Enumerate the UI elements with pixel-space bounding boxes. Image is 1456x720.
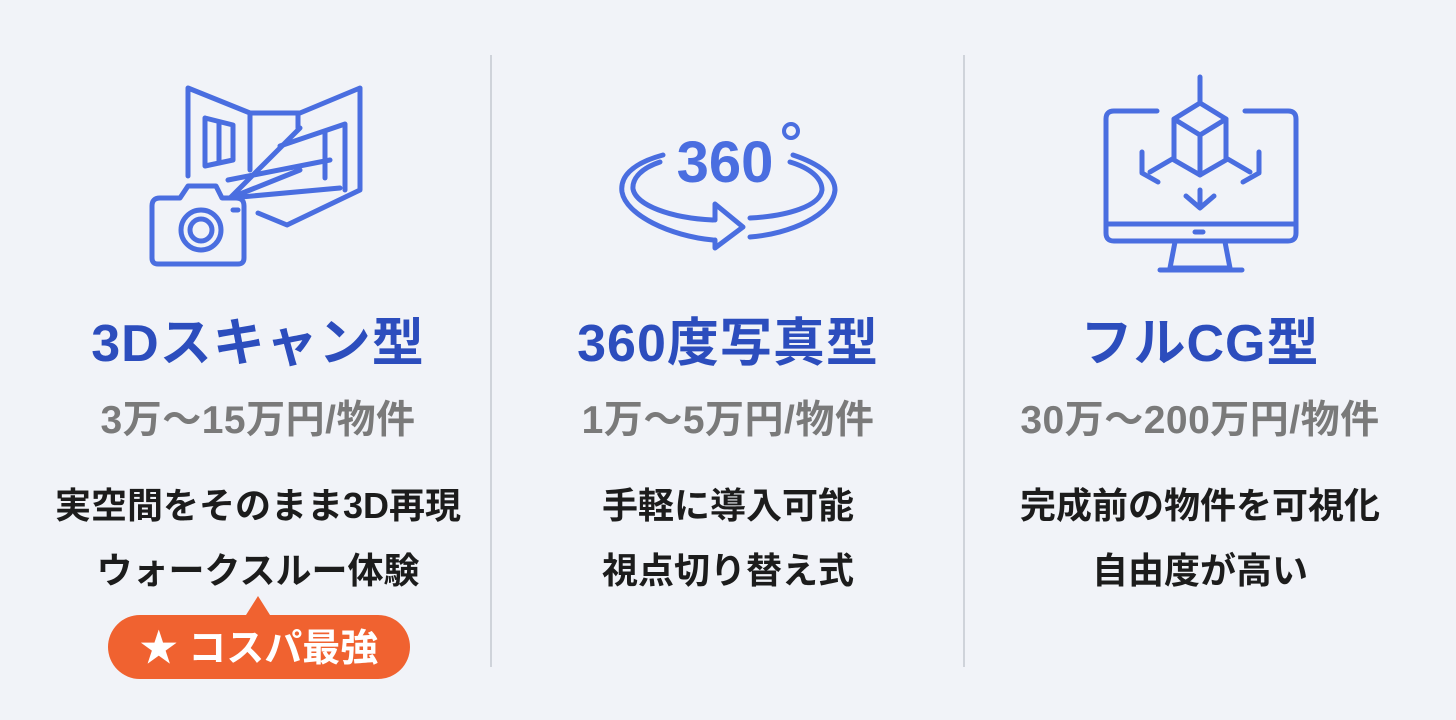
panel: 3D scan: ウォークスルー体験 [97,550,419,591]
panel: full CG: 自由度が高い [1092,550,1308,591]
panel: 360 photo: 視点切り替え式 [602,550,854,591]
callout badge [108,596,410,679]
price: 1万〜5万円/物件 [582,399,874,442]
heading: フルCG型 [1080,315,1320,373]
icon: 360 rotation: 360 [677,130,773,195]
heading: 360度写真型 [577,315,879,373]
panel: 360 photo [577,122,879,591]
heading: 3Dスキャン型 [91,315,425,373]
price: 3万〜15万円/物件 [101,399,415,442]
description: 完成前の物件を可視化 [1020,485,1380,526]
icon: monitor with cube [1104,74,1298,272]
panel: 3D scan [55,86,461,679]
icon: 360 rotation [619,122,838,250]
description: 手軽に導入可能 [602,485,854,526]
panel: full CG [1020,74,1380,591]
icon: room scan with camera [150,86,362,266]
callout badge: ★ コスパ最強 [140,628,378,670]
description: 実空間をそのまま3D再現 [55,485,461,526]
price: 30万〜200万円/物件 [1020,399,1380,442]
